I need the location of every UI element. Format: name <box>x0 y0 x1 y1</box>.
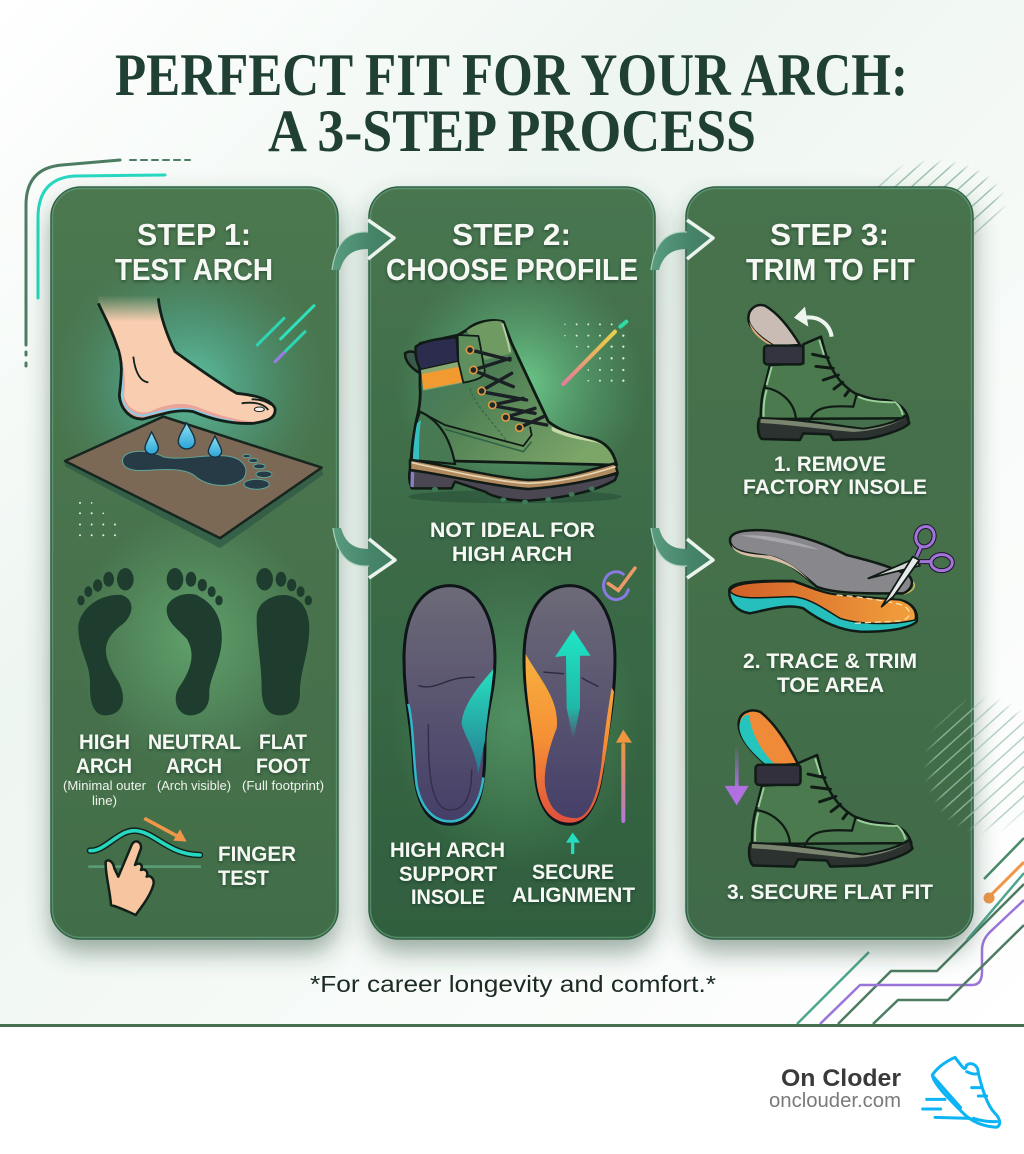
heading: step 3: STEP 3: <box>770 217 889 252</box>
icon: wet footprint <box>123 451 272 489</box>
panel: step 3 trim to fit <box>686 187 973 939</box>
heading: step 1: STEP 1: <box>137 217 251 252</box>
icon: scissors <box>868 524 952 607</box>
decoration: speed streaks <box>257 306 314 362</box>
label: neutral arch: (Arch visible) <box>157 779 231 793</box>
label: high arch <box>63 731 146 808</box>
illustration: secure alignment insole <box>524 586 615 824</box>
arrow: step 1 to step 2 lower <box>333 528 395 578</box>
decoration: right hatching <box>920 695 1024 835</box>
decoration: dots <box>79 502 116 536</box>
decoration: top-right hatching <box>878 160 1006 236</box>
label: secure alignment <box>512 861 635 907</box>
heading: step 2: CHOOSE PROFILE <box>386 252 638 287</box>
illustration: boot removing factory insole <box>748 305 909 440</box>
arrow: orange upward <box>616 730 632 823</box>
label: finger test: FINGER <box>218 843 296 866</box>
icon: water drops <box>145 423 222 457</box>
decoration: dots and slash <box>564 323 624 382</box>
label: trace and trim toe area <box>743 650 917 697</box>
title: A 3-STEP PROCESS <box>268 98 756 164</box>
label: neutral arch <box>148 731 241 793</box>
arrow: teal small upward <box>566 832 580 854</box>
brand name: onclouder.com <box>769 1090 901 1112</box>
label: trace and trim toe area: TOE AREA <box>777 674 884 697</box>
label: high arch: (Minimal outer <box>63 779 146 793</box>
illustration: finger test <box>88 818 201 915</box>
footnote: *For career longevity and comfort.* <box>310 971 716 997</box>
panel: step 2 choose profile <box>369 187 655 939</box>
label: flat foot: FLAT <box>259 731 307 754</box>
arrow: step 2 to step 3 lower <box>651 528 713 578</box>
footprint: flat foot <box>256 568 312 715</box>
illustration: foot <box>98 295 314 423</box>
label: high arch: ARCH <box>76 755 132 778</box>
footprint: neutral arch <box>167 568 223 715</box>
label: remove factory insole: FACTORY INSOLE <box>743 476 927 499</box>
label: high arch support insole <box>390 839 505 909</box>
label: flat foot <box>242 731 324 793</box>
title: PERFECT FIT FOR YOUR ARCH: <box>115 42 908 108</box>
label: neutral arch: ARCH <box>166 755 222 778</box>
heading: step 1 <box>115 217 273 287</box>
decoration: bottom-right circuit lines <box>797 838 1024 1024</box>
label: secure alignment: ALIGNMENT <box>512 884 635 907</box>
footer divider <box>0 1024 1024 1027</box>
label: flat foot: FOOT <box>256 755 310 778</box>
illustration: trace and trim insole with scissors <box>729 524 952 632</box>
illustration: mat with footprint <box>65 417 323 548</box>
heading: step 2 <box>386 217 638 287</box>
panel: step 1 test arch <box>50 187 338 939</box>
title <box>115 42 908 164</box>
label: finger test <box>218 843 296 890</box>
illustration: boot <box>405 320 626 504</box>
decoration: top-left circuit lines <box>26 160 190 374</box>
footprint: high arch <box>77 568 134 715</box>
illustration: boot with new insole <box>739 710 912 867</box>
icon: running shoe logo <box>923 1057 1000 1127</box>
label: high arch: HIGH <box>79 731 130 754</box>
illustration: high arch support insole <box>404 586 495 824</box>
arrow: step 2 to step 3 upper <box>651 220 713 270</box>
label: high arch: line) <box>92 794 117 808</box>
brand name <box>769 1065 901 1112</box>
label: high arch support insole: INSOLE <box>411 886 485 909</box>
label: neutral arch: NEUTRAL <box>148 731 241 754</box>
heading: step 3: TRIM TO FIT <box>746 252 915 287</box>
heading: step 2: STEP 2: <box>452 217 571 252</box>
label: secure alignment: SECURE <box>532 861 614 884</box>
label: flat foot: (Full footprint) <box>242 779 324 793</box>
label: finger test: TEST <box>218 867 269 890</box>
icon: check mark <box>604 568 635 600</box>
brand name: On Cloder <box>781 1065 901 1092</box>
arrow: step 1 to step 2 upper <box>332 220 394 270</box>
label: high arch support insole: SUPPORT <box>399 863 497 886</box>
label: trace and trim toe area: 2. TRACE & TRIM <box>743 650 917 673</box>
heading: step 3 <box>746 217 915 287</box>
label: remove factory insole: 1. REMOVE <box>774 453 886 476</box>
label: not ideal for high arch <box>430 519 595 566</box>
label: secure flat fit: 3. SECURE FLAT FIT <box>727 881 933 904</box>
label: not ideal for high arch: HIGH ARCH <box>452 543 572 566</box>
arrow: purple downward <box>725 744 749 805</box>
label: high arch support insole: HIGH ARCH <box>390 839 505 862</box>
label: not ideal for high arch: NOT IDEAL FOR <box>430 519 595 542</box>
heading: step 1: TEST ARCH <box>115 252 273 287</box>
label: remove factory insole <box>743 453 927 499</box>
